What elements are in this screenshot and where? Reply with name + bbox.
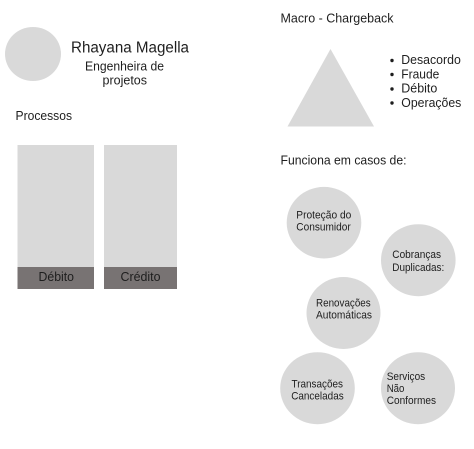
profile header bbox=[5, 27, 189, 88]
circle: Proteção do Consumidor: Proteção do bbox=[296, 210, 351, 222]
circle: Cobranças Duplicadas: Cobranças bbox=[392, 249, 441, 261]
label band: Crédito bbox=[104, 267, 177, 289]
circle: Serviços Não Conformes bbox=[381, 352, 455, 424]
circle: Renovações Automáticas bbox=[306, 277, 380, 349]
bullet: Desacordo: Desacordo bbox=[401, 52, 461, 67]
bullet: Fraude: Fraude bbox=[401, 66, 439, 81]
triangle bbox=[288, 49, 374, 126]
bullet: Operações: Operações bbox=[401, 95, 462, 110]
card: Débito bbox=[18, 145, 94, 289]
avatar circle bbox=[5, 27, 61, 81]
circle: Transações Canceladas bbox=[280, 352, 355, 424]
bullet: Débito: Débito bbox=[401, 81, 437, 96]
circle: Serviços Não Conformes: Conformes bbox=[387, 395, 436, 407]
role: second line: projetos bbox=[102, 72, 147, 88]
circle: Serviços Não Conformes: Serviços bbox=[387, 371, 426, 383]
heading: Processos: Processos bbox=[16, 108, 72, 123]
bullet list bbox=[390, 52, 462, 110]
circle: Cobranças Duplicadas: Duplicadas: bbox=[392, 262, 444, 274]
heading: Funciona em casos de: Funciona em casos de: bbox=[280, 152, 406, 168]
circle: Serviços Não Conformes: Não bbox=[387, 383, 404, 395]
circle: Transações Canceladas: Transações bbox=[292, 379, 343, 391]
circle: Proteção do Consumidor: Consumidor bbox=[296, 222, 351, 234]
label band: Débito bbox=[18, 267, 94, 289]
label: Crédito: Crédito bbox=[120, 269, 160, 284]
heading: Macro - Chargeback: Macro - Chargeback bbox=[280, 11, 394, 26]
name: Rhayana Magella bbox=[71, 40, 189, 56]
label: Débito: Débito bbox=[38, 269, 74, 284]
circle: Transações Canceladas: Canceladas bbox=[291, 391, 344, 403]
circle: Renovações Automáticas: Automáticas bbox=[316, 310, 372, 322]
role: first line: Engenheira de bbox=[85, 58, 164, 74]
circle: Cobranças Duplicadas bbox=[381, 224, 456, 296]
card: Crédito bbox=[104, 145, 177, 289]
circle: Renovações Automáticas: Renovações bbox=[316, 298, 371, 310]
circle: Proteção do Consumidor bbox=[287, 187, 361, 258]
